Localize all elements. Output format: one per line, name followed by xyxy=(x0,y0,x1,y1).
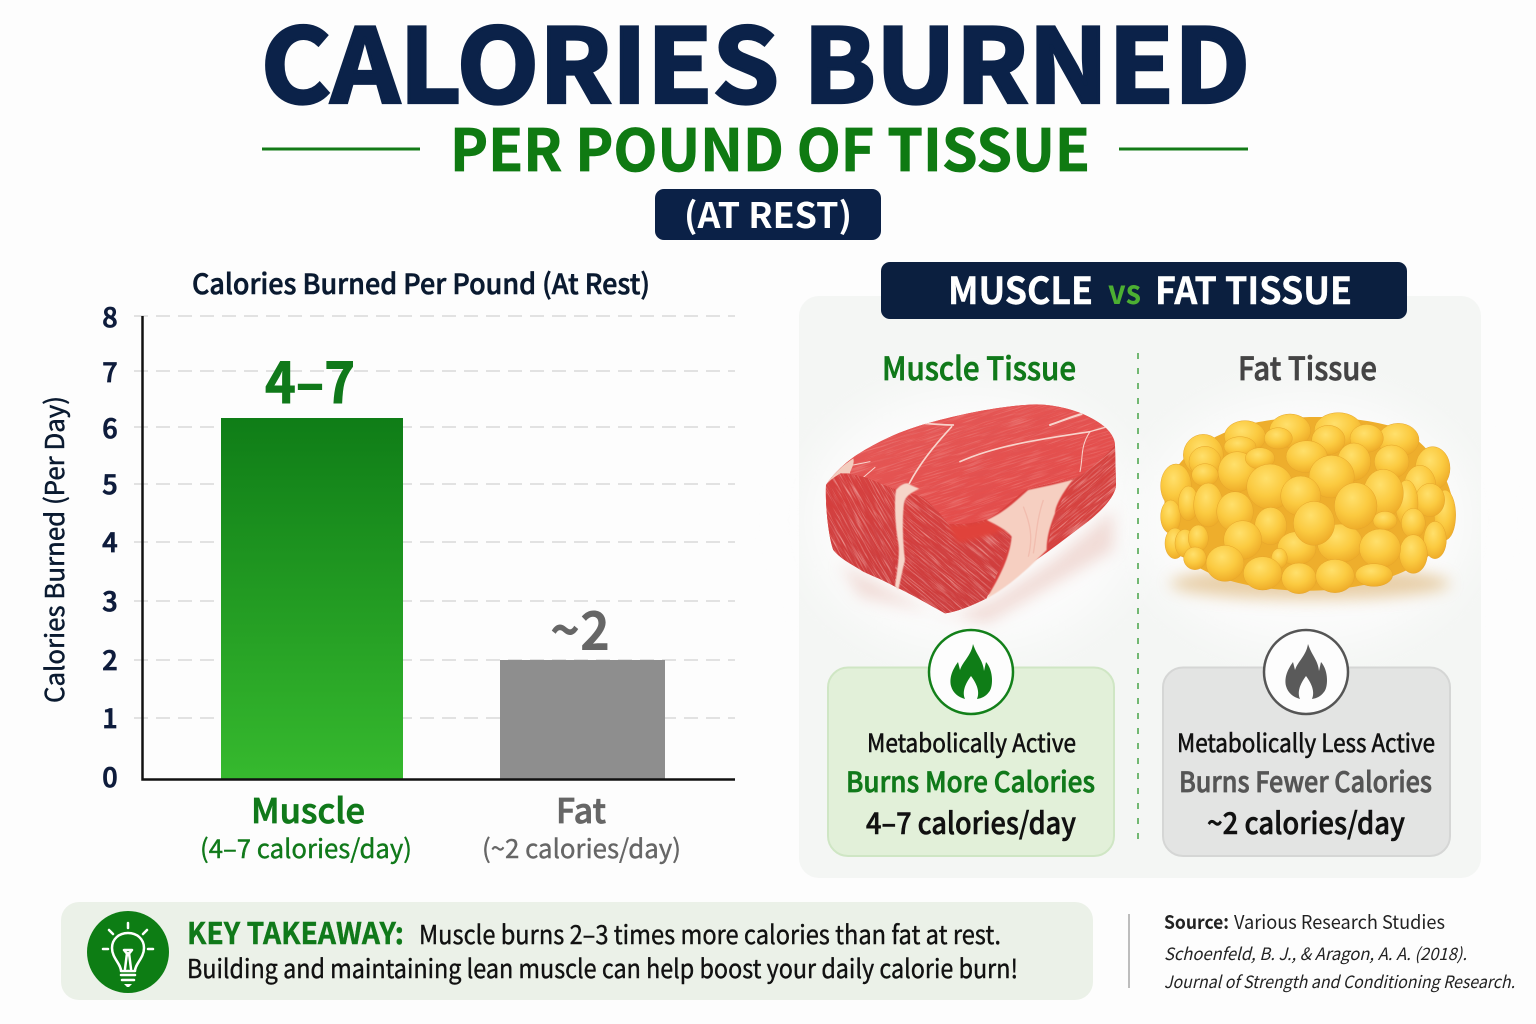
muscle tissue heading: Muscle Tissue xyxy=(882,344,1076,390)
bar chart xyxy=(35,263,735,866)
y axis tick labels: 0 xyxy=(102,756,118,795)
y axis tick labels: 1 xyxy=(102,697,118,736)
source citation: Journal of Strength and Conditioning Research. xyxy=(1164,968,1515,993)
card: muscle summary xyxy=(828,668,1114,856)
value: muscle: 4–7 xyxy=(265,339,355,420)
card: fat summary: ~2 calories/day xyxy=(1207,799,1405,843)
left face xyxy=(826,474,896,586)
icon: green flame xyxy=(929,630,1013,714)
right face xyxy=(1048,445,1116,545)
takeaway label: KEY TAKEAWAY: xyxy=(187,909,404,953)
dashed divider xyxy=(1137,353,1139,845)
fat tissue heading: Fat Tissue xyxy=(1238,344,1377,390)
panel heading: MUSCLE xyxy=(948,261,1093,315)
icon: gray flame xyxy=(1264,630,1348,714)
front face xyxy=(895,494,1012,614)
card: muscle summary: Metabolically Active xyxy=(867,724,1076,760)
category label: muscle: (4–7 calories/day) xyxy=(200,829,412,866)
image: raw muscle meat xyxy=(826,404,1119,627)
card: muscle summary: Burns More Calories xyxy=(846,761,1095,801)
takeaway text xyxy=(187,915,1018,986)
card: muscle summary: 4–7 calories/day xyxy=(866,799,1076,843)
fat seams xyxy=(895,483,919,590)
y axis tick labels: 6 xyxy=(102,407,118,446)
panel heading: vs xyxy=(1108,266,1141,314)
top face xyxy=(826,404,1115,524)
y axis tick labels: 8 xyxy=(102,296,118,335)
bar: muscle xyxy=(221,418,403,779)
source citation: Source: xyxy=(1164,908,1229,935)
key takeaway banner xyxy=(61,902,1093,1000)
category label: fat xyxy=(482,784,681,866)
axes xyxy=(142,316,735,780)
chart title: Calories Burned Per Pound (At Rest) xyxy=(192,263,650,303)
category label: muscle xyxy=(200,784,412,866)
value: fat: ~2 xyxy=(550,587,610,666)
y axis tick labels xyxy=(102,296,118,795)
takeaway text: Muscle burns 2–3 times more calories than fat at rest. xyxy=(419,915,1001,952)
subtitle with side rules: PER POUND OF TISSUE xyxy=(450,104,1090,188)
source citation: Schoenfeld, B. J., & Aragon, A. A. (2018). xyxy=(1164,940,1467,965)
card: fat summary: Burns Fewer Calories xyxy=(1179,761,1432,801)
category label: muscle: Muscle xyxy=(251,784,365,833)
image: yellow fat tissue xyxy=(1161,413,1456,600)
card: fat summary xyxy=(1163,668,1450,856)
y axis title: Calories Burned (Per Day) xyxy=(35,396,72,703)
icon: light bulb xyxy=(87,911,169,993)
panel heading xyxy=(881,261,1407,319)
source citation: Various Research Studies xyxy=(1234,908,1445,935)
takeaway text: Building and maintaining lean muscle can help boost your daily calorie burn! xyxy=(187,949,1018,986)
y axis tick labels: 3 xyxy=(102,580,118,619)
subtitle with side rules xyxy=(262,104,1248,188)
category label: fat: (~2 calories/day) xyxy=(482,829,681,866)
bar: fat xyxy=(500,660,665,779)
y axis tick labels: 7 xyxy=(102,351,118,390)
panel heading: FAT TISSUE xyxy=(1155,261,1352,315)
y axis tick labels: 5 xyxy=(102,463,118,502)
vertical separator xyxy=(1128,914,1130,988)
y axis tick labels: 4 xyxy=(102,521,118,560)
card: fat summary: Metabolically Less Active xyxy=(1177,724,1435,760)
category label: fat: Fat xyxy=(556,784,606,833)
source citation xyxy=(1164,908,1515,993)
panel: muscle vs fat comparison xyxy=(740,261,1481,878)
y axis tick labels: 2 xyxy=(102,639,118,678)
at rest pill: (AT REST) xyxy=(684,188,852,239)
